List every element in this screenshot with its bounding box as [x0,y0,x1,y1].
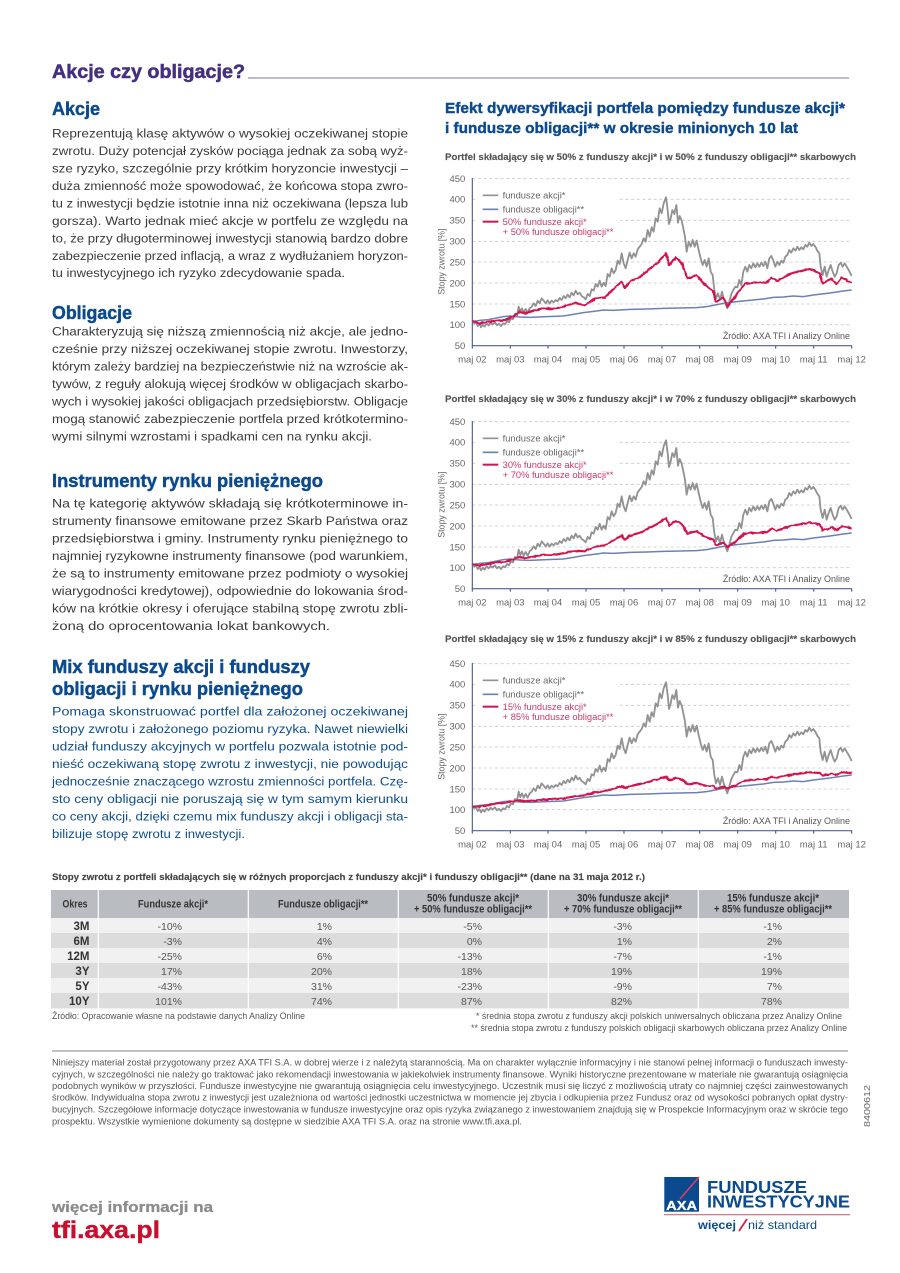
line chart 50/50: Źródło: AXA TFI i Analizy Online [723,331,850,341]
line chart 50/50 [436,174,866,366]
table rows: 10Y [69,996,90,1008]
text block: Obligacje [51,324,408,444]
line chart 30/70: Źródło: AXA TFI i Analizy Online [723,574,850,584]
document code: 8400612 [862,1085,872,1127]
logo: AXA Fundusze Inwestycyjne: więcej [697,1218,736,1232]
table rows: 78% [761,996,782,1008]
line chart 15/85: maj 05 [572,840,600,851]
line chart 50/50: maj 07 [648,355,676,366]
line chart 30/70: 400 [450,438,465,449]
line chart 30/70: maj 12 [837,598,866,609]
disclaimer: Niniejszy materiał został przygotowany przez AXA TFI S.A. w dobrej wierze i z należytą starannością. Ma on charakter wyłącznie informacyjny i nie stanowi pełnej informacji o funduszach inwesty- [52,1058,848,1068]
line chart 15/85: 200 [450,763,465,774]
line chart 15/85: 50 [455,826,465,837]
line chart 50/50: 200 [450,278,465,289]
table header: Okres [62,898,88,910]
text block: Mix funduszy: Pomaga skonstruować portfel dla założonej oczekiwanej [52,704,408,718]
line chart 15/85: 150 [450,784,465,795]
text block: Instrumenty [51,496,408,633]
text block: Instrumenty: Na tę kategorię aktywów składają się krótkoterminowe in- [52,496,408,510]
line chart 15/85: 300 [450,722,465,733]
table header: Fundusze akcji* [138,898,209,910]
panel: Akcje [52,99,408,280]
line chart 30/70: 350 [450,459,465,470]
line chart 30/70: maj 07 [648,598,676,609]
disclaimer: cyjnych, w szczególności nie należy go traktować jako rekomendacji inwestowania w jakiekolwiek instrumenty finansowe. Wyniki historyczne prezentowane w materiale nie gwarantują osiągnięcia [52,1070,848,1080]
text block: Instrumenty: wiarygodności kredytowej), odpowiednie do lokowania środ- [51,584,408,598]
line chart 50/50: fundusze obligacji** [503,205,584,215]
table rows: 4% [317,936,332,948]
text block: Akcje [52,126,408,280]
text block: Instrumenty: że są to instrumenty emitowane przez podmioty o wysokiej [52,566,408,580]
disclaimer: prospektu. Wszystkie wymienione dokumenty są dostępne w siedzibie AXA TFI S.A. oraz na stronie www.tfi.axa.pl. [52,1116,522,1126]
line chart 50/50: maj 03 [496,355,525,366]
text block: Obligacje: wymi silnymi wzrostami i spadkami cen na rynku akcji. [51,430,372,444]
table rows: -43% [157,981,182,993]
text block: Obligacje: którym zależy bardziej na bezpieczeństwie niż na wzroście ak- [52,360,408,374]
table rows: 18% [461,966,482,978]
line chart 50/50: maj 10 [761,355,790,366]
line chart 30/70: 200 [450,521,465,532]
line chart 50/50: maj 09 [723,355,752,366]
line chart 30/70 [436,417,866,609]
footer: more information [51,1199,214,1244]
text block: Akcje: gorsza). Warto jednak mieć akcje w portfelu ze względu na [52,214,408,228]
table rows: 31% [311,981,332,993]
text block: Instrumenty: przedsiębiorstwa i gminy. Instrumenty rynku pieniężnego to [52,532,408,546]
table rows: 82% [611,996,632,1008]
line chart 15/85: maj 02 [458,840,487,851]
text block: Akcje: sze ryzyko, szczególnie przy krótkim horyzoncie inwestycji – [52,161,408,175]
disclaimer [52,1058,848,1126]
line chart 50/50: fundusze akcji* [503,191,566,201]
line chart 50/50: maj 12 [837,355,866,366]
line chart 50/50: 350 [450,216,465,227]
line chart 15/85: Źródło: AXA TFI i Analizy Online [723,816,850,826]
icon: AXA square [664,1177,699,1213]
line chart 30/70: fundusze obligacji** [503,448,584,458]
icon: AXA square: AXA [666,1198,698,1213]
table rows: 6M [74,936,90,948]
table rows: -23% [457,981,482,993]
chart title 30/70: Portfel składający się w 30% z funduszy akcji* i w 70% z funduszy obligacji** skarbowych [445,394,856,405]
table rows: -1% [763,951,782,963]
line chart 50/50: 50 [455,341,465,352]
text block: Akcje: zabezpieczenie przed inflacją, a wraz z wydłużaniem horyzon- [52,249,408,263]
table rows: 20% [311,966,332,978]
line chart 30/70: maj 11 [800,598,828,609]
line chart 30/70: fundusze akcji* [503,434,566,444]
heading: Akcje: Akcje [52,99,100,119]
table rows: -10% [157,921,182,933]
footer: more information: tfi.axa.pl [52,1217,160,1244]
line chart 15/85: maj 10 [761,840,790,851]
line chart 30/70: 150 [450,542,465,553]
heading: diversification effect: Efekt dywersyfikacji portfela pomiędzy fundusze akcji* [445,100,845,117]
table rows: 19% [611,966,632,978]
text block: Akcje: duża zmienność może spowodować, że końcowa stopa zwro- [52,179,408,193]
table rows: 87% [461,996,482,1008]
line chart 30/70: Stopy zwrotu [%] [436,472,446,538]
line chart 15/85: 250 [450,742,465,753]
line chart 15/85: 100 [450,805,465,816]
text block: Akcje: tu z inwestycji będzie istotnie inna niż oczekiwana (lepsza lub [52,196,408,210]
text block: Akcje: zwrotu. Duży potencjał zysków pociąga jednak za sobą wyż- [52,144,408,158]
line chart 30/70: maj 10 [761,598,790,609]
text block: Mix funduszy: udział funduszy akcyjnych w portfelu pozwala istotnie pod- [52,740,408,754]
text block: Mix funduszy: stopy zwrotu i założonego poziomu ryzyka. Nawet niewielki [52,722,408,736]
table rows: 3Y [75,966,90,978]
line chart 50/50: maj 11 [800,355,828,366]
line chart 30/70: 100 [450,563,465,574]
line chart 30/70: 50 [455,584,465,595]
line chart 15/85: maj 03 [496,840,525,851]
table rows: 1% [617,936,632,948]
line chart 15/85: 350 [450,701,465,712]
line chart 15/85: 15% fundusze akcji* [503,702,587,712]
text block: Obligacje: cześnie przy niższej oczekiwanej stopie zwrotu. Inwestorzy, [52,342,408,356]
line chart 50/50: 400 [450,195,465,206]
line chart 30/70: maj 09 [723,598,752,609]
line chart 30/70: maj 06 [610,598,638,609]
logo: AXA Fundusze Inwestycyjne: niż standard [748,1218,817,1232]
text block: Mix funduszy: nieść oczekiwaną stopę zwrotu z inwestycji, nie powodując [52,757,408,771]
text block: Instrumenty: strumenty finansowe emitowane przez Skarb Państwa oraz [52,514,408,528]
text block: Mix funduszy: co ceny akcji, dzięki czemu mix funduszy akcji i obligacji sta- [52,810,408,824]
table rows: 12M [67,951,90,963]
line chart 15/85: 450 [450,659,465,670]
text block: Mix funduszy [51,704,408,841]
line chart 15/85: maj 11 [800,840,828,851]
line chart 50/50: maj 05 [572,355,600,366]
line chart 30/70: maj 03 [496,598,525,609]
text block: Akcje: tu inwestycyjnego ich ryzyko zdecydowanie spada. [52,266,345,280]
table rows: 2% [767,936,782,948]
table rows: 17% [161,966,182,978]
line chart 50/50: maj 02 [458,355,487,366]
heading: Mix funduszy: obligacji i rynku pieniężnego [52,679,303,699]
table rows: -3% [163,936,182,948]
line chart 50/50: 50% fundusze akcji* [503,217,587,227]
text block: Instrumenty: ków na krótkie okresy i oferujące stabilną stopę zwrotu zbli- [52,602,408,616]
disclaimer: bucyjnych. Szczegółowe informacje dotyczące inwestowania w fundusze inwestycyjne oraz opis ryzyka związanego z inwestowaniem znajdują się w Prospekcie Informacyjnym oraz w skrócie tego [52,1104,848,1114]
line chart 30/70: maj 04 [534,598,562,609]
table rows: -25% [157,951,182,963]
line chart 15/85: 400 [450,680,465,691]
text block: Obligacje: mogą stanowić zabezpieczenie portfela przed krótkotermino- [52,412,408,426]
table rows: 101% [155,996,182,1008]
text block: Akcje: Reprezentują klasę aktywów o wysokiej oczekiwanej stopie [52,126,408,140]
line chart 15/85: maj 09 [723,840,752,851]
page title: Akcje czy obligacje? [52,62,245,83]
text block: Obligacje: tywów, z reguły alokują więcej środków w obligacjach skarbo- [52,377,408,391]
table footnotes [471,1011,847,1033]
line chart 50/50: 250 [450,257,465,268]
table footnotes: * średnia stopa zwrotu z funduszy akcji polskich uniwersalnych obliczana przez Analizy Online [476,1011,842,1021]
line chart 15/85: maj 04 [534,840,562,851]
text block: Mix funduszy: sto ceny obligacji nie poruszają się w tym samym kierunku [52,792,408,806]
line chart 50/50: 450 [450,174,465,185]
table: returns [51,890,849,1009]
chart title 50/50: Portfel składający się w 50% z funduszy akcji* i w 50% z funduszy obligacji** skarbowych [445,152,856,163]
table header: 50% fundusze akcji* [427,892,520,904]
text block: Mix funduszy: jednocześnie znaczącego wzrostu zmienności portfela. Czę- [51,774,408,788]
text block: Instrumenty: żoną do oprocentowania lokat bankowych. [52,619,330,633]
table footnotes: ** średnia stopa zwrotu z funduszy polskich obligacji skarbowych obliczana przez Analizy Online [471,1023,847,1033]
table header: + 50% fundusze obligacji** [414,904,533,916]
line chart 15/85: maj 08 [685,840,714,851]
heading: Instrumenty rynku pieniężnego: Instrumenty rynku pieniężnego [52,471,323,491]
table rows: -1% [763,921,782,933]
line chart 30/70: 300 [450,480,465,491]
heading: diversification effect [445,100,845,137]
table header [62,892,833,916]
table rows: 19% [761,966,782,978]
line chart 30/70: maj 02 [458,598,487,609]
line chart 15/85: Stopy zwrotu [%] [436,714,446,780]
line chart 15/85 [436,659,866,851]
footer: more information: więcej informacji na [51,1199,214,1216]
logo: AXA Fundusze Inwestycyjne [664,1177,850,1232]
logo: AXA Fundusze Inwestycyjne: FUNDUSZE [707,1177,807,1197]
line chart 15/85: fundusze obligacji** [503,690,584,700]
logo: AXA Fundusze Inwestycyjne: INWESTYCYJNE [707,1192,850,1212]
panel: Obligacje [51,303,408,444]
panel: Mix funduszy [51,657,408,841]
table rows: 6% [317,951,332,963]
line chart 50/50: 100 [450,320,465,331]
line chart 50/50: 150 [450,299,465,310]
line chart 15/85: + 85% fundusze obligacji** [503,712,614,722]
disclaimer: środków. Indywidualna stopa zwrotu z inwestycji jest uzależniona od wartości jednostki uczestnictwa w momencie jej zbycia i odkupienia przez Fundusz oraz od wysokości pobranych opłat dystry- [52,1092,848,1102]
heading: Mix funduszy [52,657,310,699]
panel: Instrumenty rynku pieniężnego [51,471,408,633]
line chart 50/50: + 50% fundusze obligacji** [503,227,614,237]
table header: 30% fundusze akcji* [577,892,670,904]
table header: Fundusze obligacji** [278,898,369,910]
table rows: 1% [317,921,332,933]
text block: Obligacje: wych i wysokiej jakości obligacjach przedsiębiorstw. Obligacje [51,394,408,408]
table rows: 5Y [75,981,90,993]
table rows: 74% [311,996,332,1008]
heading: Mix funduszy: Mix funduszy akcji i funduszy [52,657,310,677]
table rows: 3M [74,921,90,933]
table rows: -7% [613,951,632,963]
line chart 30/70: + 70% fundusze obligacji** [503,470,614,480]
line chart 50/50: Stopy zwrotu [%] [436,229,446,295]
line chart 30/70: 450 [450,417,465,428]
table rows: -9% [613,981,632,993]
chart title 15/85: Portfel składający się w 15% z funduszy akcji* i w 85% z funduszy obligacji** skarbowych [445,634,856,645]
line chart 30/70: maj 05 [572,598,600,609]
heading: diversification effect: i fundusze obligacji** w okresie minionych 10 lat [445,120,798,137]
text block: Obligacje: Charakteryzują się niższą zmiennością niż akcje, ale jedno- [52,324,408,338]
table rows: -3% [613,921,632,933]
line chart 50/50: maj 04 [534,355,562,366]
line chart 30/70: 250 [450,500,465,511]
heading: Obligacje: Obligacje [52,303,132,323]
line chart 50/50: maj 08 [685,355,714,366]
disclaimer: podobnych wyników w przyszłości. Fundusze inwestycyjne nie gwarantują osiągnięcia celu inwestycyjnego. Uczestnik musi się liczyć z możliwością utraty co najmniej części zainwestowanych [52,1081,848,1091]
line chart 30/70: maj 08 [685,598,714,609]
line chart 50/50: maj 06 [610,355,638,366]
table rows: -13% [457,951,482,963]
text block: Akcje: to, że przy długoterminowej inwestycji stanowią bardzo dobre [52,231,408,245]
line chart 15/85: maj 12 [837,840,866,851]
line chart 15/85: maj 07 [648,840,676,851]
line chart 15/85: fundusze akcji* [503,676,566,686]
table rows: 7% [767,981,782,993]
line chart 50/50: 300 [450,237,465,248]
table source note: Źródło: Opracowanie własne na podstawie danych Analizy Online [52,1011,305,1021]
table rows [67,921,782,1008]
table rows: -5% [463,921,482,933]
table rows: 0% [467,936,482,948]
line chart 30/70: 30% fundusze akcji* [503,460,587,470]
text block: Mix funduszy: bilizuje stopę zwrotu z inwestycji. [52,827,245,841]
table title: Stopy zwrotu z portfeli składających się w różnych proporcjach z funduszy akcji* i funduszy obligacji** (dane na 31 maja 2012 r.) [52,872,645,883]
table header: 15% fundusze akcji* [727,892,820,904]
text block: Instrumenty: najmniej ryzykowne instrumenty finansowe (pod warunkiem, [52,549,408,563]
table header: + 70% fundusze obligacji** [564,904,683,916]
line chart 15/85: maj 06 [610,840,638,851]
table header: + 85% fundusze obligacji** [714,904,833,916]
